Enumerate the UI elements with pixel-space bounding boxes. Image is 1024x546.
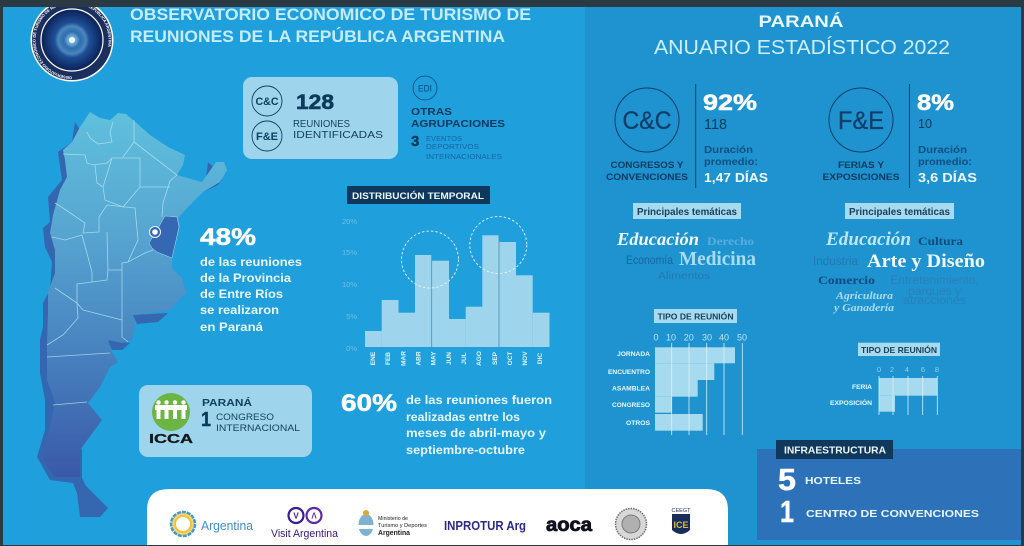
map pin: Paraná [150,226,160,238]
map body [43,112,227,477]
stat: 48%: de Entre Ríos [200,289,283,301]
logo: CEEGT: CEEGT [672,508,691,514]
icon: C&C circle: C&C [622,107,672,135]
month labels: JUL [461,352,468,365]
Entre Ríos province highlight [149,216,179,258]
axis labels: 10 [666,332,676,342]
right heading: ANUARIO ESTADÍSTICO 2022 [654,36,950,59]
logo: Visit Argentina: V [293,512,299,520]
category labels: FERIA [852,385,873,391]
axis labels: 2 [890,365,894,374]
axis labels: 8 [935,365,939,374]
panel: congresos y convenciones: Duración [704,144,753,156]
word cloud right: principales temáticas: Comercio [818,273,875,287]
y axis labels: 0% [346,344,357,353]
word cloud right: principales temáticas: Agricultura [835,291,893,302]
map of Argentina [37,112,227,517]
card: 128 reuniones identificadas: 128 [296,91,334,114]
bar chart: distribución temporal [342,216,550,366]
axis labels: 50 [737,332,747,342]
icon: ICCA logo: ICCA [149,431,194,446]
card: ICCA: INTERNACIONAL [216,423,300,434]
category labels: OTROS [626,421,650,427]
observatory logo: OBSERVATORIO ECONÓMICO DE TURISMO DE REUNIONES DE LA REPÚBLICA ARGENTINA [32,7,112,80]
axis labels: 6 [921,365,925,374]
month labels: FEB [385,352,392,365]
category labels: JORNADA [617,352,651,358]
card: 128 reuniones identificadas: REUNIONES [293,118,350,130]
axis labels: 0 [877,365,881,374]
axis labels: 0 [653,332,659,342]
card: ICCA: PARANÁ [202,396,252,409]
month labels: MAY [430,351,438,365]
word cloud right: principales temáticas: Industria [813,256,859,268]
otras agrupaciones: 3 [411,133,419,150]
stat: 48% [200,224,302,334]
otras agrupaciones: DEPORTIVOS [426,144,479,151]
panel: congresos y convenciones [606,84,768,188]
month labels: AGO [476,351,483,366]
icon: C&C [252,86,282,116]
icon: C&C: C&C [256,96,279,108]
stat: 48%: de la Provincia [200,273,292,285]
right heading [654,12,950,59]
icon: F&E [252,121,282,151]
chart: tipo de reunión C&C: TIPO DE REUNIÓN [658,310,734,322]
map shadow silhouette [37,122,108,517]
otras agrupaciones: AGRUPACIONES [411,118,505,130]
stat: 60%: realizadas entre los [406,412,520,424]
axis labels: 20 [684,332,694,342]
panel: infraestructura: 1 [780,494,794,529]
panel: congresos y convenciones: 92% [703,90,757,115]
word cloud right: principales temáticas: Educación [825,229,911,250]
panel: infraestructura: HOTELES [805,475,861,487]
panel: ferias y exposiciones: EXPOSICIONES [822,172,900,183]
logo: Visit Argentina: Visit Argentina [271,528,339,540]
y axis labels: 15% [342,248,357,257]
province lines [47,120,177,405]
word cloud right: principales temáticas: Principales temáticas [849,207,950,218]
card: 128 reuniones identificadas [243,77,398,159]
panel: ferias y exposiciones: 8% [917,90,954,115]
word cloud right: principales temáticas [813,203,985,314]
otras agrupaciones: INTERNACIONALES [426,154,502,161]
logo: Argentina: Argentina [201,518,254,533]
category labels [830,385,873,407]
stat: 60%: 60% [341,390,397,417]
panel: ferias y exposiciones: Duración [918,144,967,156]
y axis labels: 20% [342,217,357,226]
otras agrupaciones [411,76,505,161]
axis labels: 4 [905,365,909,374]
y axis labels: 10% [342,280,357,289]
icon: F&E circle: F&E [838,107,884,135]
panel: ferias y exposiciones: promedio: [918,156,972,168]
axis labels [653,332,747,342]
panel: infraestructura: 5 [778,462,796,497]
month labels: SEP [492,351,499,365]
month labels: JUN [446,352,453,365]
word cloud right: principales temáticas: parques y [908,286,961,298]
icon: ICCA logo [149,393,194,446]
category labels: ENCUENTRO [608,370,650,376]
panel: congresos y convenciones: CONGRESOS Y [610,160,684,171]
stat: 60% [341,390,552,457]
word cloud left: principales temáticas: Economía [626,253,673,267]
word cloud left: principales temáticas [616,203,756,282]
month labels [370,351,544,366]
panel: ferias y exposiciones: FERIAS Y [838,160,885,171]
card: ICCA [139,385,312,457]
word cloud right: principales temáticas: y Ganadería [832,303,894,314]
shadow: southern coast bays [133,313,168,324]
stat: 60%: meses de abril-mayo y [406,428,547,440]
chart heading: distribución temporal: DISTRIBUCIÓN TEMPORAL [352,190,484,202]
panel: congresos y convenciones: promedio: [704,156,758,168]
month labels: OCT [507,352,514,365]
y axis labels [342,217,357,353]
logo: Ministerio de Turismo y Deportes: Turismo y Deportes [378,523,427,529]
stat: 48%: se realizaron [200,305,279,317]
panel: infraestructura: CENTRO DE CONVENCIONES [806,508,979,520]
logo: Ministerio de Turismo y Deportes [358,510,427,537]
panel: ferias y exposiciones [822,84,977,188]
grid lines [879,376,937,415]
shadow: Misiones edge [203,162,222,192]
stat: 48%: de las reuniones [200,257,302,269]
y axis labels: 5% [346,312,357,321]
category labels [608,352,651,427]
word cloud left: principales temáticas: Medicina [679,248,756,270]
grid lines [672,343,742,435]
logo: Ministerio de Turismo y Deportes: Argentina [378,530,410,537]
chart heading: distribución temporal [347,186,490,204]
word cloud left: principales temáticas: Alimentos [658,270,710,282]
card: ICCA: CONGRESO [216,412,274,423]
month labels: MAR [400,351,408,366]
bars [365,235,550,347]
month labels: NOV [522,351,529,366]
title: REUNIONES DE LA REPÚBLICA ARGENTINA [130,27,505,46]
icon: C&C circle [615,88,679,152]
card: ICCA: 1 [201,409,211,431]
highlight circles [402,231,458,288]
word cloud right: principales temáticas: Arte y Diseño [867,251,985,272]
logo: Visit Argentina [271,508,339,540]
category labels: CONGRESO [612,403,650,409]
card: 128 reuniones identificadas: IDENTIFICADAS [293,129,383,141]
month labels: DIC [537,353,544,364]
month labels: ABR [416,351,422,366]
panel: congresos y convenciones: 118 [704,116,727,133]
panel: infraestructura: INFRAESTRUCTURA [784,446,886,456]
right heading: PARANÁ [758,12,844,31]
month labels: ENE [370,351,377,365]
word cloud right: principales temáticas: Entretenimiento, [890,275,979,287]
logo: aoca: aoca [546,515,592,536]
right panel background [585,0,1024,546]
otras agrupaciones: EVENTOS [426,136,462,143]
chart: tipo de reunión C&C [608,309,747,435]
logo: Argentina [171,512,254,536]
stat: 48%: en Paraná [200,322,264,334]
title [130,6,531,46]
icon: EDI: EDI [418,84,432,94]
panel: ferias y exposiciones: 10 [918,117,932,131]
otras agrupaciones: OTRAS [411,106,452,118]
chart: tipo de reunión F&E [830,343,940,415]
logo: INPROTUR Arg: INPROTUR Arg [444,518,526,533]
bars [879,378,937,412]
logo: Ministerio de Turismo y Deportes: Ministerio de [378,516,408,522]
panel: infraestructura [757,440,1024,540]
word cloud right: principales temáticas: Cultura [918,234,963,248]
chart: tipo de reunión F&E: TIPO DE REUNIÓN [861,344,937,355]
icon: F&E: F&E [256,131,278,143]
word cloud right: principales temáticas: atracciones [903,295,966,307]
title: OBSERVATORIO ECONOMICO DE TURISMO DE [130,6,531,24]
logos footer panel [147,489,728,546]
bars [655,347,735,431]
logo: CEEGT: ICE [673,520,689,530]
axis labels: 30 [702,332,712,342]
axis labels: 40 [719,332,729,342]
axis labels [877,365,939,374]
word cloud left: principales temáticas: Educación [616,229,699,249]
word cloud left: principales temáticas: Principales temáticas [637,207,737,218]
logo: university seal [616,508,646,540]
panel: ferias y exposiciones: 3,6 DÍAS [918,170,977,185]
panel: congresos y convenciones: 1,47 DÍAS [704,170,768,185]
category labels: EXPOSICIÓN [830,399,872,407]
stat: 60%: de las reuniones fueron [406,395,552,407]
word cloud left: principales temáticas: Derecho [707,234,754,248]
icon: F&E circle [829,88,893,152]
stat: 48%: 48% [200,224,256,251]
stat: 60%: septiembre-octubre [406,445,525,457]
logo: CEEGT [672,508,691,534]
category labels: ASAMBLEA [612,386,651,392]
panel: congresos y convenciones: CONVENCIONES [606,172,688,183]
logo: Visit Argentina: Λ [311,512,317,520]
